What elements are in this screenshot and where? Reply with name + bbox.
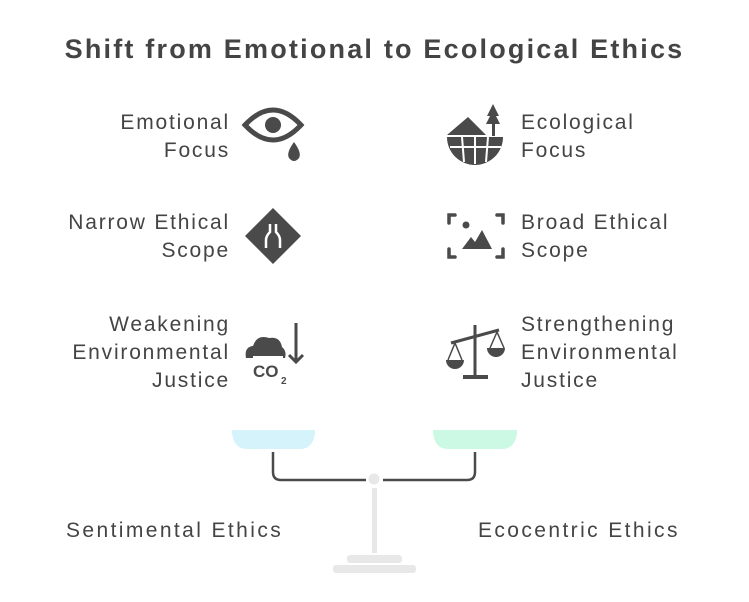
label: sentimental ethics: Sentimental Ethics (66, 519, 283, 542)
icon: globe with mountain and tree (447, 104, 503, 165)
label: emotional focus (120, 111, 230, 162)
label: narrow ethical scope: Narrow Ethical (68, 211, 230, 234)
label: ecological focus (521, 111, 635, 162)
label: ecological focus: Focus (521, 139, 587, 162)
label: broad ethical scope: Scope (521, 239, 590, 262)
icon: eye with tear (245, 110, 301, 161)
icon: co2 cloud down arrow: 2 (281, 376, 287, 387)
label: ecological focus: Ecological (521, 111, 635, 134)
scale: left pan (232, 430, 315, 449)
icon: narrow road sign (245, 208, 301, 264)
label: broad ethical scope: Broad Ethical (521, 211, 669, 234)
label: weakening environmental justice: Environmental (72, 341, 230, 364)
label: strengthening environmental justice (521, 313, 679, 392)
label: weakening environmental justice (72, 313, 230, 392)
icon: image frame (449, 215, 503, 257)
icon: tilted balance scale (446, 325, 505, 377)
scale: beam (273, 452, 475, 480)
label: ecocentric ethics: Ecocentric Ethics (478, 519, 680, 542)
label: strengthening environmental justice: Environmental (521, 341, 679, 364)
label: emotional focus: Focus (164, 139, 230, 162)
label: strengthening environmental justice: Justice (521, 369, 599, 392)
label: strengthening environmental justice: Strengthening (521, 313, 675, 336)
label: narrow ethical scope: Scope (161, 239, 230, 262)
label: weakening environmental justice: Justice (152, 369, 230, 392)
scale: pivot and stand (333, 474, 416, 573)
label: narrow ethical scope (68, 211, 230, 262)
label: weakening environmental justice: Weakening (109, 313, 230, 336)
icon: co2 cloud down arrow: CO (253, 362, 278, 381)
label: broad ethical scope (521, 211, 669, 262)
scale: right pan (433, 430, 517, 449)
label: emotional focus: Emotional (120, 111, 230, 134)
title: Shift from Emotional to Ecological Ethics (65, 34, 684, 64)
icon: co2 cloud down arrow (246, 323, 303, 387)
